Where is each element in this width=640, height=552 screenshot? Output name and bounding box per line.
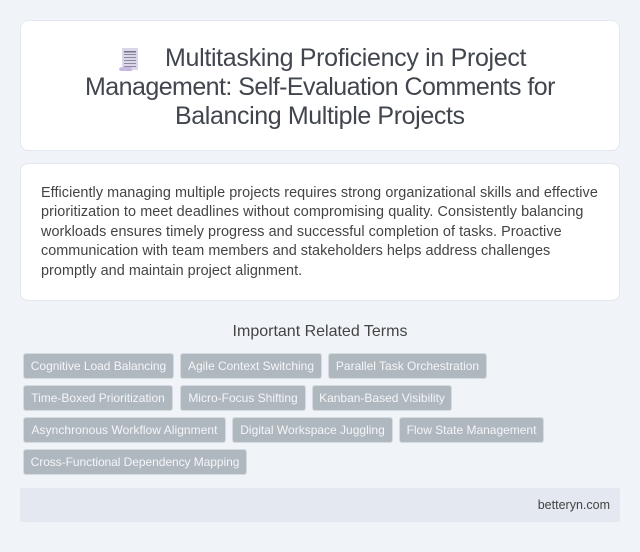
- title card: [20, 20, 620, 151]
- icon: document receipt: [119, 48, 138, 71]
- tag: Kanban-Based Visibility: [319, 391, 445, 405]
- title: Multitasking Proficiency in Project: [165, 44, 526, 72]
- section heading: Important Related Terms: [233, 323, 407, 340]
- tag: [328, 353, 487, 379]
- tag: [399, 417, 544, 443]
- intro text: Efficiently managing multiple projects requires strong organizational skills and effective: [41, 185, 598, 201]
- tag: Micro-Focus Shifting: [188, 391, 298, 405]
- title: [85, 44, 556, 130]
- tag: Digital Workspace Juggling: [240, 423, 385, 437]
- tag: Asynchronous Workflow Alignment: [31, 423, 218, 437]
- title: Management: Self-Evaluation Comments for: [85, 73, 555, 101]
- tag: [23, 353, 174, 379]
- tag: Flow State Management: [407, 423, 536, 437]
- tag: [23, 449, 247, 475]
- intro card: [20, 163, 620, 301]
- tag: [180, 385, 306, 411]
- tag: Agile Context Switching: [188, 359, 314, 373]
- intro text: [41, 185, 598, 279]
- tag: [23, 385, 173, 411]
- intro text: prioritization to meet deadlines without compromising quality. Consistently balancing: [41, 204, 584, 220]
- footer: [20, 488, 620, 522]
- tag: Time-Boxed Prioritization: [31, 391, 165, 405]
- title: Balancing Multiple Projects: [175, 102, 465, 130]
- footer source: betteryn.com: [538, 498, 610, 512]
- tags: [23, 353, 544, 475]
- tag: [180, 353, 322, 379]
- intro text: workloads ensures timely progress and successful completion of tasks. Proactive: [41, 224, 562, 240]
- intro text: communication with team members and stakeholders helps address challenges: [41, 243, 550, 259]
- tag: Parallel Task Orchestration: [336, 359, 479, 373]
- tag: [232, 417, 393, 443]
- tag: Cross-Functional Dependency Mapping: [31, 455, 239, 469]
- tag: [23, 417, 226, 443]
- tag: Cognitive Load Balancing: [31, 359, 166, 373]
- intro text: promptly and maintain project alignment.: [41, 263, 302, 279]
- tag: [312, 385, 452, 411]
